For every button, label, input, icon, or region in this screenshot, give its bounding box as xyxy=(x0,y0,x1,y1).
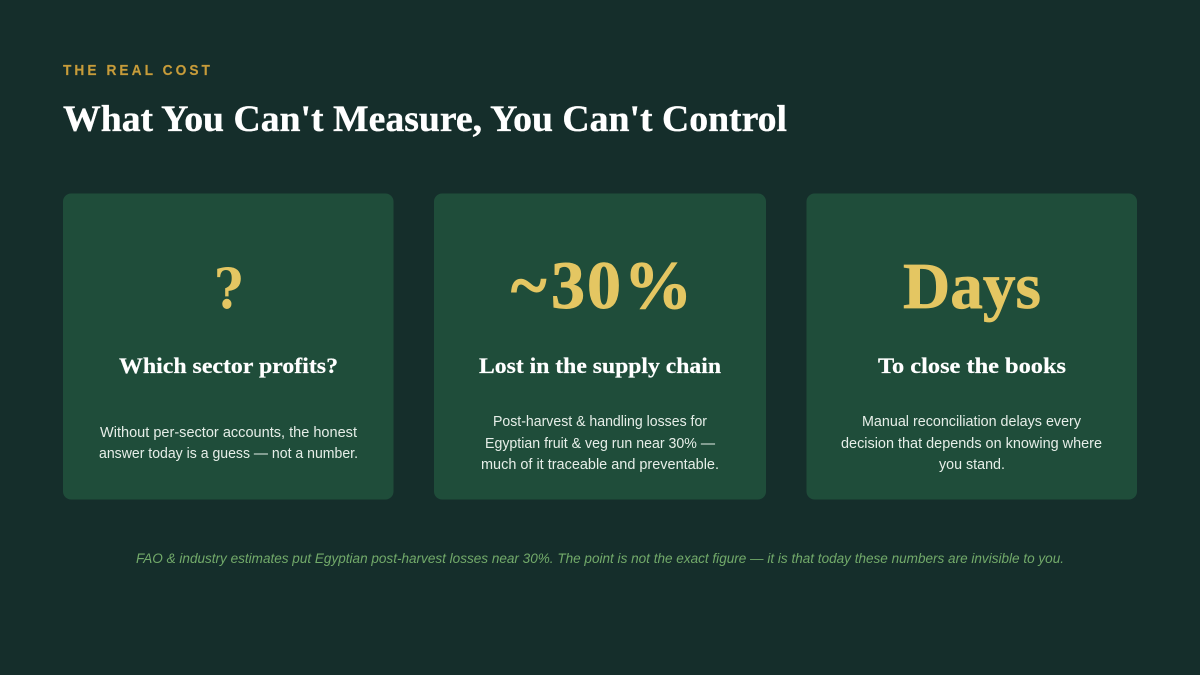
panel: to close the books xyxy=(806,194,1137,500)
card body: manual reconciliation xyxy=(841,414,1102,473)
card body: post-harvest losses: Egyptian fruit & veg run near 30% — xyxy=(485,436,715,452)
card body: post-harvest losses: much of it traceable and preventable. xyxy=(481,457,719,473)
card heading: lost in the supply chain: Lost in the supply chain xyxy=(479,353,721,378)
footnote: FAO & industry estimates put Egyptian post-harvest losses near 30%. The point is not the exact figure — it is that today these numbers are invisible to you. xyxy=(136,551,1064,566)
card body: manual reconciliation: decision that depends on knowing where xyxy=(841,436,1102,452)
card body: per-sector accounts xyxy=(99,425,358,462)
eyebrow label: THE REAL COST xyxy=(63,63,213,79)
big figure: question mark: ? xyxy=(214,256,243,321)
title: What You Can't Measure, You Can't Control xyxy=(63,99,787,140)
card body: per-sector accounts: answer today is a guess — not a number. xyxy=(99,446,358,462)
card body: manual reconciliation: Manual reconciliation delays every xyxy=(862,414,1082,430)
card heading: which sector profits: Which sector profits? xyxy=(119,353,338,378)
card body: post-harvest losses xyxy=(481,414,719,473)
panel: which sector profits xyxy=(63,194,394,500)
card body: manual reconciliation: you stand. xyxy=(939,457,1005,473)
card heading: to close the books: To close the books xyxy=(878,353,1066,378)
big figure: 30 percent: ~30% xyxy=(511,247,692,323)
card body: post-harvest losses: Post-harvest & handling losses for xyxy=(493,414,707,430)
big figure: days: Days xyxy=(903,250,1041,323)
panel: lost in the supply chain xyxy=(434,194,766,500)
card body: per-sector accounts: Without per-sector accounts, the honest xyxy=(100,425,357,441)
